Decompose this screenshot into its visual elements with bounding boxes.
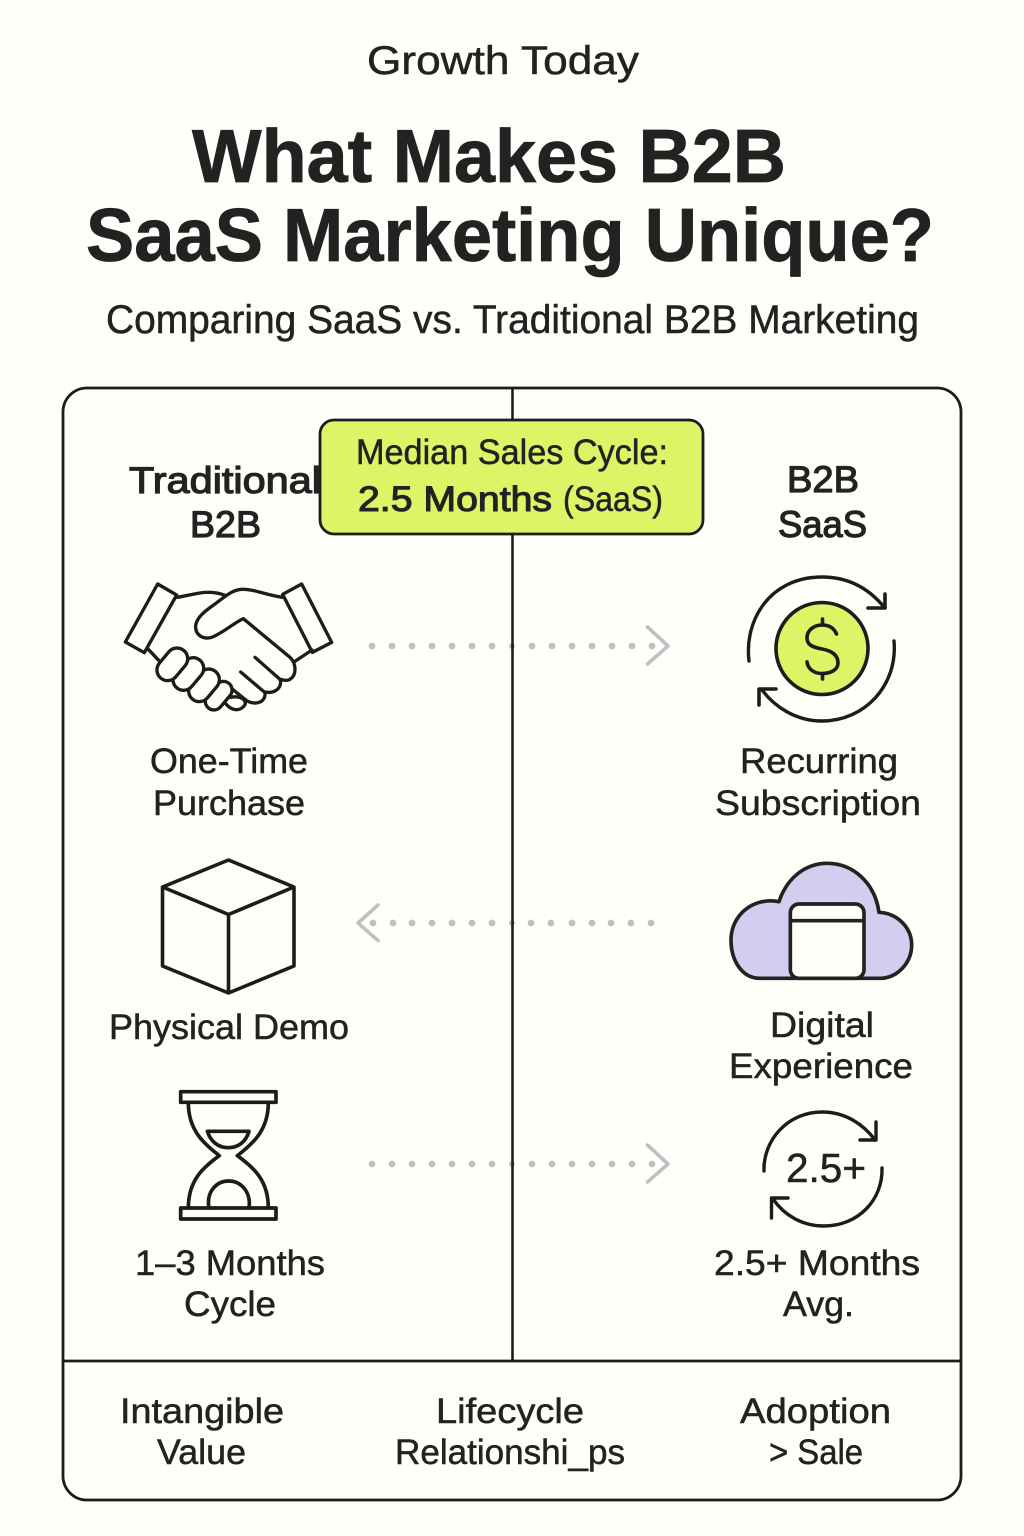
- arrow: months cycle: [369, 1145, 668, 1182]
- label: digital experience: [729, 1006, 913, 1086]
- label: one-time purchase: One-Time: [150, 742, 308, 781]
- title: SaaS Marketing Unique?: [86, 193, 934, 277]
- icon: hourglass: [181, 1092, 276, 1219]
- label: recurring subscription: Subscription: [715, 784, 921, 823]
- callout: median sales cycle: (SaaS): [563, 480, 663, 519]
- label: 1-3 months cycle: [135, 1244, 325, 1324]
- label: physical demo: Physical Demo: [109, 1008, 349, 1047]
- label: 1-3 months cycle: 1–3 Months: [135, 1244, 325, 1283]
- label: 2.5+ months avg: [714, 1244, 920, 1324]
- callout: median sales cycle: Median Sales Cycle:: [356, 433, 668, 472]
- footer: adoption over sale: Adoption: [740, 1392, 891, 1431]
- footer: lifecycle relationships: Relationshi_ps: [395, 1433, 625, 1472]
- arrow: digital to physical: [358, 905, 654, 940]
- icon: recurring dollar: [748, 577, 894, 721]
- label: recurring subscription: [715, 742, 921, 823]
- label: recurring subscription: Recurring: [740, 742, 898, 781]
- column heading: B2B SaaS: [778, 459, 867, 545]
- subtitle: Comparing SaaS vs. Traditional B2B Marketing: [106, 298, 919, 342]
- label: digital experience: Experience: [729, 1047, 913, 1086]
- column heading: B2B SaaS: SaaS: [778, 504, 867, 545]
- column heading: traditional B2B: Traditional: [129, 460, 321, 501]
- label: 1-3 months cycle: Cycle: [184, 1285, 276, 1324]
- label: 2.5+ months avg: Avg.: [783, 1285, 854, 1324]
- footer: adoption over sale: [740, 1392, 891, 1472]
- label: 2.5+ months avg: 2.5+ Months: [714, 1244, 920, 1283]
- icon: handshake: [125, 584, 332, 713]
- title: What Makes B2B: [192, 114, 786, 198]
- callout: median sales cycle: [320, 420, 703, 534]
- icon: cloud with browser window: [731, 863, 912, 978]
- footer: intangible value: Intangible: [120, 1392, 284, 1431]
- column heading: traditional B2B: B2B: [190, 504, 261, 545]
- arrow: one-time to recurring: [369, 627, 668, 664]
- footer: adoption over sale: > Sale: [769, 1433, 863, 1472]
- panel: comparison: [63, 388, 961, 1500]
- footer: lifecycle relationships: Lifecycle: [436, 1392, 584, 1431]
- column heading: traditional B2B: [129, 460, 321, 545]
- label: one-time purchase: Purchase: [153, 784, 305, 823]
- label: one-time purchase: [150, 742, 308, 823]
- icon: 2.5+ cycle: [764, 1112, 882, 1226]
- column heading: B2B SaaS: B2B: [787, 459, 859, 500]
- label: digital experience: Digital: [770, 1006, 874, 1045]
- footer: lifecycle relationships: [395, 1392, 625, 1472]
- footer: intangible value: [120, 1392, 284, 1472]
- title: [86, 114, 934, 277]
- callout: median sales cycle: 2.5 Months: [358, 480, 552, 519]
- footer: intangible value: Value: [157, 1433, 246, 1472]
- icon: cube: [162, 860, 294, 993]
- icon: 2.5+ cycle: 2.5+: [786, 1145, 866, 1191]
- brand name: Growth Today: [367, 39, 639, 83]
